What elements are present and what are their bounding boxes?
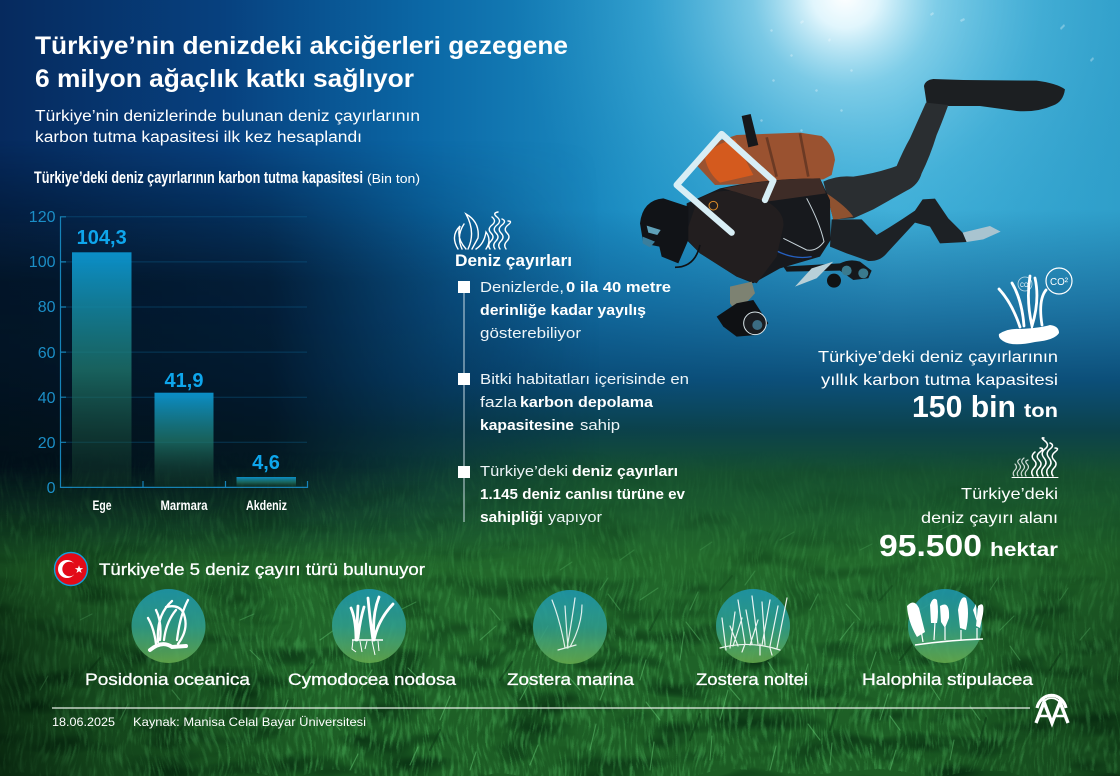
arm and shoulder	[685, 191, 783, 283]
bullet 2: fazla	[480, 394, 518, 411]
species: Zostera marina	[507, 590, 635, 689]
bar: Marmara	[154, 370, 214, 513]
chart heading: Türkiye’deki deniz çayırlarının karbon tutma kapasitesi	[34, 169, 363, 187]
stat: seagrass area: Türkiye’deki	[961, 486, 1058, 503]
source: Kaynak: Manisa Celal Bayar Üniversitesi	[133, 715, 366, 729]
head and mask	[640, 198, 688, 263]
icon: Turkish flag	[54, 552, 88, 586]
upper fin	[924, 79, 1065, 111]
bullet 1	[458, 279, 671, 342]
bar: Ege: 104,3	[77, 227, 127, 249]
title: Türkiye’nin denizdeki akciğerleri gezegene	[35, 32, 568, 60]
bar: Akdeniz: Akdeniz	[246, 497, 287, 513]
white quadrat frame	[677, 134, 773, 233]
stat: annual carbon capture: Türkiye’deki deniz çayırlarının	[818, 349, 1058, 366]
icon: AA logo	[1036, 695, 1068, 723]
bullet 3: 1.145 deniz canlısı türüne ev	[480, 486, 686, 503]
fin tip	[963, 226, 1001, 242]
gauges	[783, 260, 872, 280]
section heading: 5 species: Türkiye'de 5 deniz çayırı türü bulunuyor	[99, 560, 425, 579]
species: Posidonia oceanica: Posidonia oceanica	[85, 670, 251, 689]
stat: annual carbon capture: 150 bin	[912, 389, 1016, 424]
species: Cymodocea nodosa	[288, 589, 457, 689]
icon: wavy seagrass	[1012, 438, 1058, 478]
y axis labels: 40	[38, 390, 56, 407]
bar: Ege: Ege	[92, 497, 112, 513]
title	[35, 32, 568, 93]
title: 6 milyon ağaçlık katkı sağlıyor	[35, 65, 414, 93]
y axis labels: 20	[38, 435, 56, 452]
bullet 2	[458, 371, 689, 434]
chart heading: (Bin ton)	[367, 171, 420, 186]
icon: seagrass	[454, 212, 510, 249]
bullet 2: sahip	[580, 417, 620, 434]
icon: seagrass with CO2	[999, 268, 1072, 344]
stat: annual carbon capture: ton	[1024, 401, 1058, 422]
species: Zostera noltei	[696, 589, 808, 689]
species: Halophila stipulacea: Halophila stipulacea	[862, 670, 1034, 689]
y axis labels: 120	[29, 209, 56, 226]
bullet 3: sahipliği	[480, 509, 543, 526]
species: Posidonia oceanica	[85, 589, 251, 689]
y axis labels	[29, 209, 56, 497]
footer	[52, 708, 1030, 729]
subtitle: Türkiye’nin denizlerinde bulunan deniz çayırlarının	[35, 108, 420, 125]
bullet 1: gösterebiliyor	[480, 325, 581, 342]
bar: Marmara: Marmara	[160, 497, 208, 513]
section heading: 5 species	[54, 552, 425, 586]
scuba tank	[697, 133, 835, 185]
camera with hand	[730, 282, 755, 313]
bullet 3: deniz çayırları	[572, 463, 678, 480]
bar chart: carbon capture capacity by sea	[29, 209, 308, 513]
y axis labels: 60	[38, 345, 56, 362]
torso	[687, 178, 831, 283]
bar: Marmara: 41,9	[165, 370, 203, 392]
stat: annual carbon capture: yıllık karbon tutma kapasitesi	[821, 372, 1058, 389]
species: Zostera noltei: Zostera noltei	[696, 670, 808, 689]
species: Zostera marina: Zostera marina	[507, 670, 635, 689]
bar: Akdeniz: 4,6	[252, 452, 280, 474]
bullet 2: Bitki habitatları içerisinde en	[480, 371, 689, 388]
bullet 1: 0 ila 40 metre	[566, 279, 671, 296]
bullet 2: kapasitesine	[480, 417, 574, 434]
icon: seagrass with CO2: CO²	[1020, 283, 1030, 289]
bullet 3: Türkiye’deki	[480, 463, 568, 480]
panel: deniz çayırları facts	[454, 212, 689, 526]
stat: seagrass area: 95.500	[879, 528, 982, 563]
stat: seagrass area: deniz çayırı alanı	[921, 510, 1058, 527]
species: Halophila stipulacea	[862, 589, 1034, 689]
bar: Ege	[72, 227, 132, 513]
date: 18.06.2025	[52, 715, 115, 729]
y axis labels: 80	[38, 299, 56, 316]
bullet 2: karbon depolama	[520, 394, 654, 411]
upper leg	[823, 103, 948, 219]
species: Cymodocea nodosa: Cymodocea nodosa	[288, 670, 457, 689]
y axis labels: 100	[29, 254, 56, 271]
icon: seagrass with CO2: CO²	[1050, 277, 1069, 288]
diver photo illustration	[640, 79, 1065, 337]
bullet 1: derinliğe kadar yayılış	[480, 302, 646, 319]
stat: seagrass area	[879, 438, 1059, 563]
subtitle: karbon tutma kapasitesi ilk kez hesaplandı	[35, 129, 362, 146]
bullet 3	[458, 463, 686, 526]
bullet 1: Denizlerde,	[480, 279, 564, 296]
bullet 3: yapıyor	[548, 509, 602, 526]
y axis labels: 0	[47, 480, 56, 497]
lower leg	[830, 199, 967, 261]
subtitle	[35, 108, 420, 146]
stat: seagrass area: hektar	[990, 540, 1059, 561]
stat: annual carbon capture	[818, 268, 1072, 424]
bar: Akdeniz	[236, 452, 296, 513]
heading: Deniz çayırları	[455, 252, 572, 270]
